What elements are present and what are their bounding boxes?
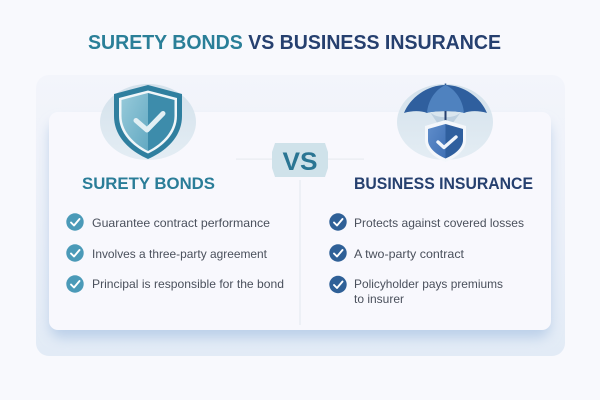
divider: vertical center [300, 180, 301, 325]
item: three-party [66, 244, 268, 262]
divider: horizontal left [236, 158, 272, 160]
item: guarantee: Guarantee contract performance [92, 216, 270, 230]
list: surety bonds [66, 213, 284, 293]
icon: surety shield [100, 84, 196, 160]
heading: business insurance: BUSINESS INSURANCE [354, 175, 533, 193]
VS badge: VS [282, 148, 318, 176]
item: premiums: Policyholder pays premiums [354, 277, 503, 291]
item: principal [66, 275, 284, 293]
VS badge [272, 143, 328, 177]
heading: surety bonds: SURETY BONDS [82, 175, 215, 193]
item: premiums: to insurer [354, 292, 404, 306]
panel: comparison card [49, 112, 551, 330]
item: covered losses [329, 213, 524, 231]
item: covered losses: Protects against covered losses [354, 216, 524, 230]
item: two-party: A two-party contract [354, 247, 465, 261]
card shadow [50, 122, 550, 338]
item: guarantee [66, 213, 270, 231]
item: two-party [329, 244, 465, 262]
divider: horizontal right [328, 158, 364, 160]
item: principal: Principal is responsible for the bond [92, 277, 284, 291]
title: SURETY BONDS VS BUSINESS INSURANCE [88, 32, 501, 54]
list: business insurance [329, 213, 524, 306]
panel: outer background [36, 75, 565, 356]
item: three-party: Involves a three-party agreement [92, 247, 268, 261]
item: premiums [329, 276, 503, 306]
icon: umbrella with shield [397, 84, 493, 162]
